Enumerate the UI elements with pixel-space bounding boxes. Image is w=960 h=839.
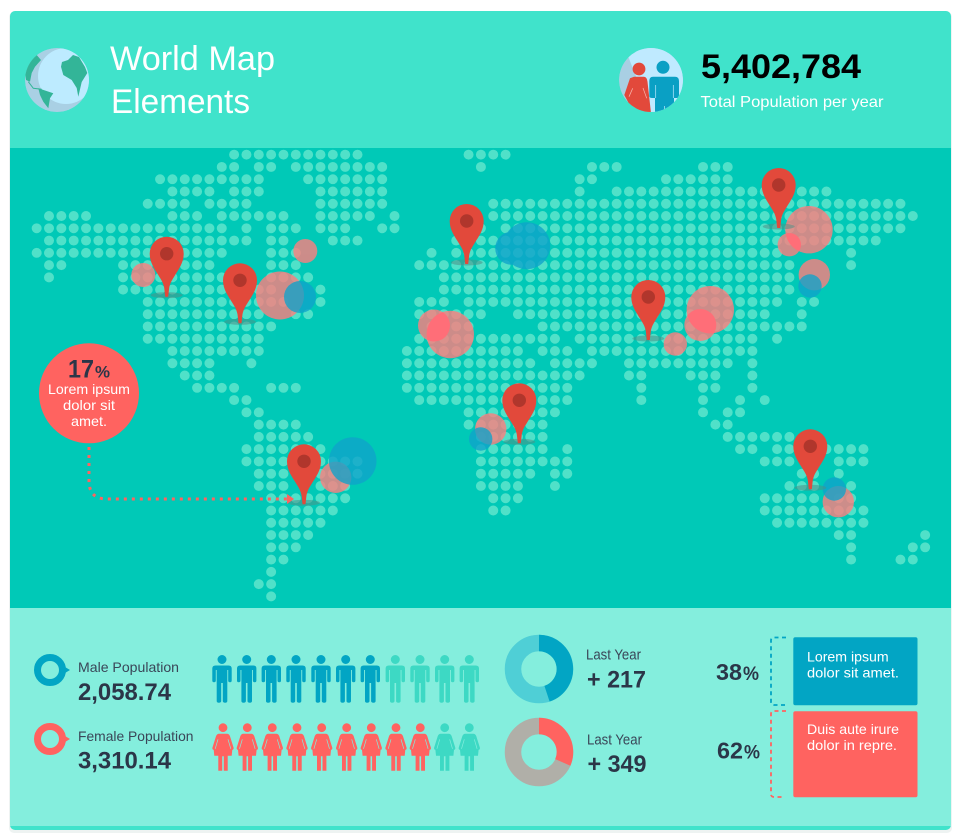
text box: red [793,711,918,797]
panel: header [10,11,951,148]
title: World Map [110,40,275,78]
stat: 62 percent: 62 [717,738,743,764]
last year female value: + 349 [588,751,646,778]
donut chart: female last year [513,726,565,778]
stat: 38 percent: % [743,664,759,685]
legend: female population: Female Population [78,728,194,744]
bracket: blue [771,638,786,705]
map pin: Europe [450,204,484,266]
bubble overlaps [418,233,801,342]
last year male value [586,646,646,694]
legend: male population [38,658,179,706]
panel: world map [10,148,951,608]
population bubbles [131,206,854,517]
legend: female population: 3,310.14 [78,748,172,775]
total population label: Total Population per year [700,94,884,111]
map pin: North America west [150,237,184,298]
total population figure: 5,402,784 [701,48,861,86]
last year male value: + 217 [587,666,646,694]
stat: 62 percent: % [744,742,760,764]
pictogram: male population [212,655,479,703]
callout: 17 percent: Lorem ipsum [48,381,130,397]
callout: 17 percent: % [95,362,110,382]
panel: statistics [10,608,951,826]
text box: blue [793,637,918,705]
callout: 17 percent: amet. [71,413,107,429]
legend: female population [38,726,194,775]
icon: couple [619,47,683,113]
arrow: callout to South America pin [89,447,294,504]
map pin: South America [287,444,321,506]
legend: male population: 2,058.74 [78,679,172,706]
pictogram: female population [212,723,480,771]
icon: globe [25,48,94,112]
map pin: Asia [631,280,665,342]
stat: 38 percent [716,659,759,685]
bracket: red [771,711,786,797]
text box: blue: Lorem ipsum [807,649,889,665]
dot-matrix world map [37,155,925,596]
map pin: North America east [223,263,257,325]
title: Elements [111,83,250,121]
last year female value [587,732,646,778]
donut chart: male last year [513,643,565,695]
callout: 17 percent: 17 [68,356,94,384]
last year male value: Last Year [586,646,641,664]
text box: blue: dolor sit amet. [807,665,899,681]
legend: male population: Male Population [78,659,179,675]
map pin: Africa [502,383,536,445]
last year female value: Last Year [587,732,642,748]
stat: 62 percent [717,738,760,764]
text box: red: Duis aute irure [807,721,899,737]
stat: 38 percent: 38 [716,659,742,685]
text box: red: dolor in repre. [807,737,897,753]
callout: 17 percent [39,343,139,443]
map pin: Oceania [793,429,827,491]
title [110,40,275,121]
map pin: Russia [762,168,796,230]
callout: 17 percent: dolor sit [63,397,115,413]
